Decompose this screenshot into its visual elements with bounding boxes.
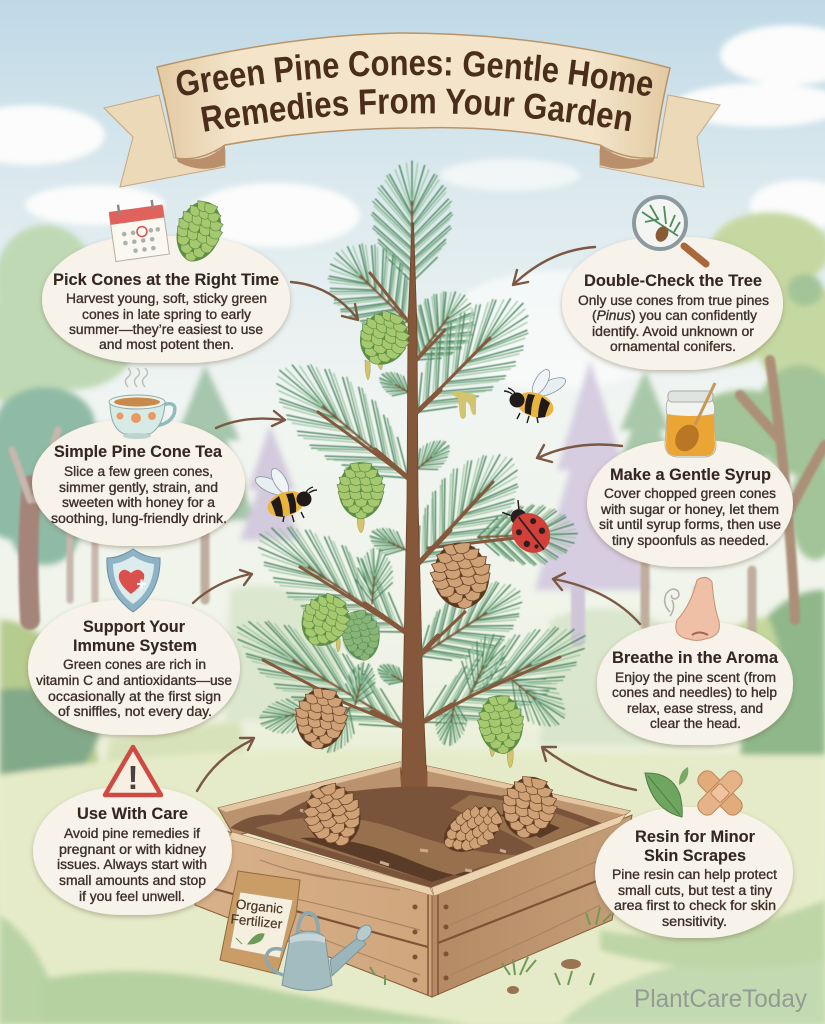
icon: nose with scent — [665, 577, 719, 640]
text block: with sugar or honey, let them — [600, 502, 779, 517]
text block: soothing, lung-friendly drink. — [51, 511, 227, 526]
icon: crossed bandage — [695, 768, 745, 818]
heading: Pick Cones at the Right Time — [53, 271, 279, 289]
heading: Make a Gentle Syrup — [610, 466, 771, 484]
heading: Double-Check the Tree — [584, 272, 762, 290]
bag label text: Fertilizer — [230, 911, 283, 932]
icon: shield with heart — [107, 549, 160, 612]
text block: if you feel unwell. — [79, 889, 185, 904]
raised garden bed — [195, 762, 632, 997]
title banner — [103, 32, 721, 188]
heading — [73, 618, 197, 655]
icon: honey jar — [665, 383, 716, 457]
right wood face — [432, 815, 632, 997]
heading: Breathe in the Aroma — [612, 649, 779, 667]
brown cones on branches — [290, 539, 496, 752]
text block: occasionally at the first sign — [48, 689, 221, 704]
text block: Slice a few green cones, — [64, 464, 213, 479]
heading: Skin Scrapes — [644, 847, 746, 865]
icon: leaves — [645, 767, 688, 817]
text block: small amounts and stop — [59, 873, 206, 888]
icon: ladybug — [496, 495, 558, 561]
panel: resin for minor skin scrapes — [595, 767, 793, 938]
text block — [66, 291, 267, 352]
title banner: Remedies From Your Garden — [201, 88, 632, 132]
text block: tiny spoonfuls as needed. — [612, 533, 769, 548]
icon: calendar — [108, 199, 169, 262]
left wood face — [195, 818, 432, 997]
icon: warning triangle — [105, 747, 161, 796]
text block: Enjoy the pine scent (from — [615, 670, 776, 685]
text block — [578, 293, 769, 354]
grass tufts — [370, 907, 611, 985]
panel: support your immune system — [28, 549, 240, 735]
text block — [51, 464, 227, 526]
text block: issues. Always start with — [57, 857, 207, 872]
soil — [230, 786, 604, 888]
text block: pregnant or with kidney — [59, 842, 206, 857]
pine cones on soil — [295, 772, 562, 863]
text block: Green cones are rich in — [63, 657, 206, 672]
heading: Support Your — [83, 618, 186, 636]
icon: warning triangle: ! — [128, 759, 138, 796]
text block: cones and needles) to help — [612, 685, 777, 700]
bag label text: Organic — [235, 897, 284, 916]
text block: simmer gently, strain, and — [59, 480, 218, 495]
watering can — [266, 913, 374, 990]
bag label text — [230, 897, 284, 932]
insects — [253, 367, 568, 561]
icon: bumblebee right — [504, 367, 568, 423]
text block: Harvest young, soft, sticky green — [66, 291, 267, 306]
icon: tea cup — [109, 368, 175, 439]
panel: simple pine cone tea — [32, 368, 245, 546]
watermark: PlantCareToday — [634, 985, 807, 1013]
heading — [635, 828, 756, 865]
title: Green Pine Cones: Gentle Home — [176, 51, 652, 96]
heading: Use With Care — [77, 805, 188, 823]
text block: area first to check for skin — [614, 898, 776, 913]
icon: magnifying glass — [634, 197, 706, 264]
green cones with resin drips — [291, 304, 527, 768]
branches — [263, 273, 560, 727]
text block: sit until syrup forms, then use — [599, 517, 781, 532]
resin drips on branches — [450, 392, 476, 419]
panel: pick cones at the right time — [42, 195, 290, 363]
text block: (Pinus) you can confidently — [592, 308, 757, 323]
text block: and most potent then. — [99, 337, 234, 352]
text block: Cover chopped green cones — [604, 486, 776, 501]
text block: summer—they’re easiest to use — [69, 322, 263, 337]
tree needle sprays — [220, 161, 601, 759]
icon: bumblebee left — [253, 466, 317, 522]
icon: green cone — [168, 195, 230, 268]
text block: small cuts, but test a tiny — [618, 883, 772, 898]
text block: of sniffles, not every day. — [58, 704, 212, 719]
trunk — [397, 223, 431, 824]
text block — [599, 486, 781, 548]
pine tree — [220, 161, 601, 824]
text block: Avoid pine remedies if — [64, 826, 200, 841]
text block: Only use cones from true pines — [578, 293, 769, 308]
text block: Pine resin can help protect — [612, 867, 777, 882]
text block: identify. Avoid unknown or — [592, 324, 755, 339]
fertilizer bag — [220, 871, 300, 974]
heading: Immune System — [73, 637, 197, 655]
text block: relax, ease stress, and — [627, 701, 763, 716]
heading: Resin for Minor — [635, 828, 756, 846]
panel: double-check the tree — [562, 197, 783, 370]
text block: sensitivity. — [662, 914, 727, 929]
text block: vitamin C and antioxidants—use — [36, 673, 232, 688]
text block — [57, 826, 207, 904]
panel: use with care — [33, 747, 232, 915]
text block — [612, 670, 777, 731]
panel: breathe in the aroma — [597, 577, 793, 745]
text block: cones in late spring to early — [82, 307, 251, 322]
text block: clear the head. — [650, 716, 741, 731]
text block: sweeten with honey for a — [62, 495, 215, 510]
arrows — [193, 247, 640, 791]
text block — [612, 867, 777, 929]
text block — [36, 657, 232, 719]
panel: make a gentle syrup — [587, 383, 793, 567]
heading: Simple Pine Cone Tea — [54, 443, 223, 461]
text block: ornamental conifers. — [610, 339, 736, 354]
